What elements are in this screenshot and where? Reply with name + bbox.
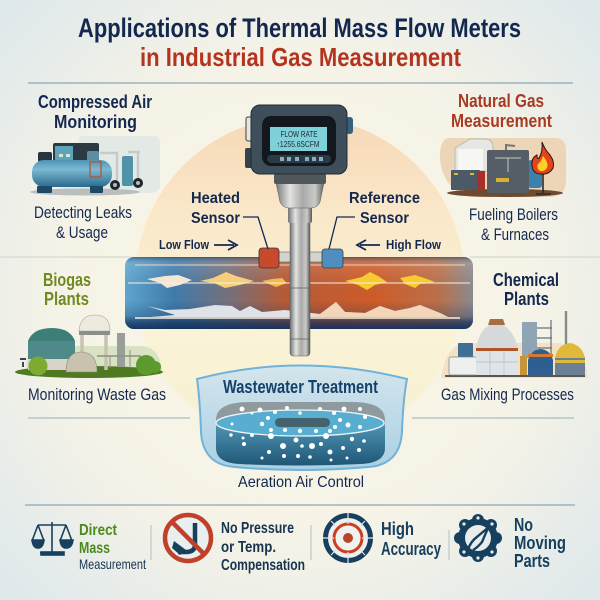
icon: biogas digesters (15, 315, 163, 378)
label: reference sensor: Reference (349, 190, 420, 207)
panel: natural gas measurement (440, 91, 566, 244)
heading: biogas: Biogas (43, 270, 91, 290)
bubbles (229, 406, 367, 462)
pipe (125, 257, 473, 329)
display text (276, 130, 320, 149)
label: heated sensor: Sensor (191, 210, 240, 227)
caption: detecting leaks (34, 203, 132, 242)
caption: fueling boilers (469, 205, 558, 244)
benefit text: No (514, 515, 533, 535)
icon: balance scale (32, 522, 73, 555)
heading: wastewater treatment: Wastewater Treatment (223, 377, 378, 397)
display text: FLOW RATE (280, 130, 318, 139)
heading: natural gas (451, 91, 552, 131)
heading: natural gas: Natural Gas (458, 91, 544, 111)
label: high flow with arrow: High Flow (386, 237, 442, 252)
benefit text: Accuracy (381, 539, 441, 559)
panel: wastewater treatment (197, 366, 407, 491)
icon: prohibited gauge (165, 515, 211, 561)
benefit text: Direct (79, 522, 118, 539)
caption: monitoring waste gas: Monitoring Waste Gas (28, 385, 166, 404)
benefit text (514, 515, 566, 571)
heading: compressed air (38, 92, 152, 132)
label: low flow with arrow: Low Flow (159, 237, 210, 252)
benefit text: High (381, 519, 414, 539)
title (78, 13, 521, 72)
benefit text: Moving (514, 533, 566, 553)
heading: compressed air: Monitoring (54, 112, 137, 132)
sensor labels (159, 190, 442, 252)
heading: chemical: Plants (504, 289, 549, 309)
benefit text (79, 522, 146, 572)
heading: chemical (493, 270, 559, 309)
benefits strip (32, 513, 566, 574)
flow flames (147, 272, 448, 317)
benefit: no moving parts (454, 514, 566, 571)
central glow (135, 117, 465, 447)
benefit text: Compensation (221, 557, 305, 574)
benefit: no pressure or temp compensation (165, 515, 305, 574)
benefit text: Parts (514, 551, 550, 571)
benefit text: Measurement (79, 556, 146, 572)
caption: detecting leaks: & Usage (56, 223, 108, 242)
sensor probes (259, 248, 343, 268)
panel: chemical plants (441, 270, 588, 404)
aeration basin (197, 366, 407, 470)
benefit text: or Temp. (221, 539, 276, 556)
caption: detecting leaks: Detecting Leaks (34, 203, 132, 222)
panel: compressed air monitoring (30, 92, 160, 242)
flow meter (245, 105, 353, 356)
heading: biogas: Plants (44, 289, 89, 309)
benefit text: Mass (79, 540, 110, 557)
caption: fueling boilers: Fueling Boilers (469, 205, 558, 224)
benefit: high accuracy (323, 513, 441, 563)
panel: biogas plants (15, 270, 166, 404)
icon: boilers and flame (440, 138, 566, 197)
title: in Industrial Gas Measurement (140, 42, 461, 72)
label: heated sensor: Heated (191, 190, 240, 207)
icon: air compressor (30, 136, 160, 196)
caption: fueling boilers: & Furnaces (481, 225, 549, 244)
display text: ↑1255.6SCFM (276, 140, 320, 149)
label: high flow with arrow (357, 237, 442, 252)
heading: biogas (43, 270, 91, 309)
dividers (0, 83, 600, 505)
heading: natural gas: Measurement (451, 111, 552, 131)
label: heated sensor (191, 190, 268, 249)
heading: compressed air: Compressed Air (38, 92, 152, 112)
icon: chemical plant (441, 311, 588, 378)
caption: aeration air control: Aeration Air Control (238, 474, 364, 491)
label: reference sensor: Sensor (360, 210, 409, 227)
transmitter housing (245, 105, 353, 174)
icon: gear (454, 514, 502, 562)
label: reference sensor (329, 190, 420, 249)
probe shaft (274, 174, 326, 356)
icon: target (323, 513, 373, 563)
benefit text: No Pressure (221, 520, 294, 537)
benefit: direct mass measurement (32, 522, 146, 572)
heading: chemical: Chemical (493, 270, 559, 290)
benefit text (221, 520, 305, 574)
benefit text (381, 519, 441, 559)
